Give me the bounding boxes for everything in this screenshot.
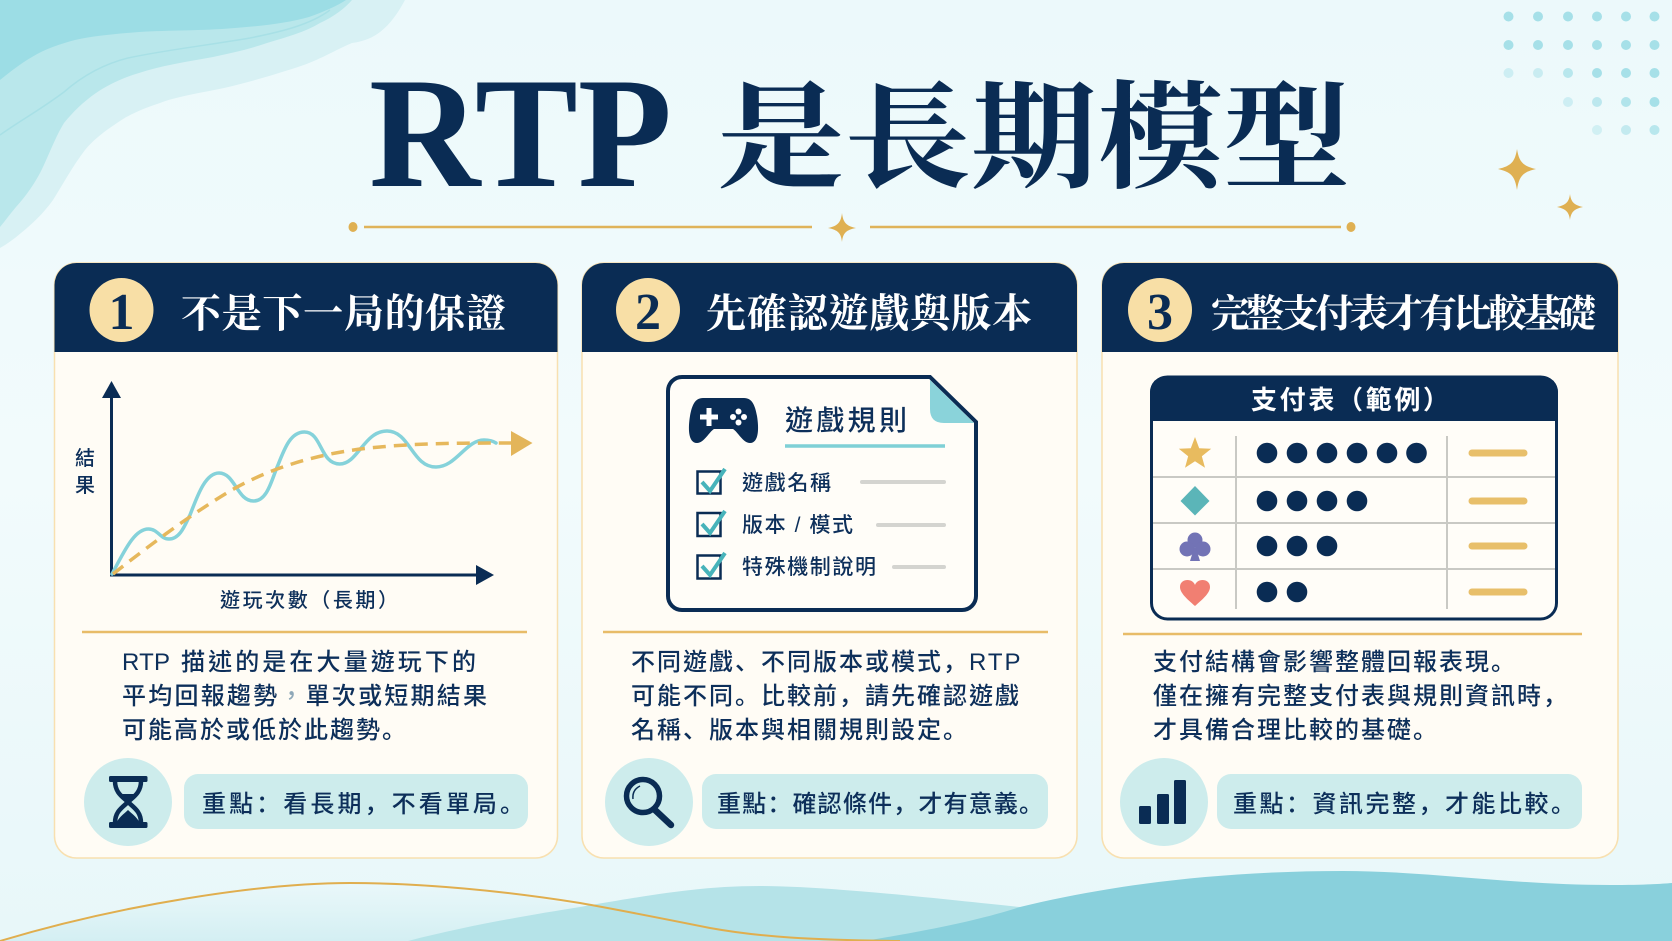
icon: hourglass [84, 758, 172, 846]
panel 2 body text [631, 642, 1023, 745]
paytable example [1150, 376, 1558, 619]
panel 3 number badge [1128, 278, 1192, 342]
panel 1 number badge: 1 [108, 284, 134, 341]
y axis [102, 381, 121, 576]
panel 3 background [1102, 263, 1618, 858]
game rules document [668, 377, 976, 610]
panel 2: confirm game and version [582, 263, 1077, 858]
panel 2 header bar [582, 263, 1077, 352]
sparkle small [1557, 194, 1583, 220]
panel 2 body text: 可能不同。比較前，請先確認遊戲 [631, 676, 1021, 711]
background waves: top-left [0, 0, 405, 248]
takeaway pill 2 [702, 774, 1048, 829]
panel 1 body text [122, 649, 489, 745]
panel 1 body text: 描述的是在大量遊玩下的 [181, 649, 478, 676]
checklist item: special mechanics: 特殊機制說明 [742, 556, 876, 579]
panel 3: complete paytable [1102, 263, 1618, 858]
y axis label [75, 447, 95, 497]
background waves: bottom [0, 871, 1672, 941]
title: 是長期模型 [718, 76, 1350, 204]
panel 1 body text: 平均回報趨勢，單次或短期結果 [122, 683, 489, 710]
title [369, 46, 1350, 221]
panel 3 body text: 僅在擁有完整支付表與規則資訊時， [1153, 676, 1569, 711]
sparkle large [1498, 149, 1536, 190]
checklist item: special mechanics [698, 553, 944, 579]
checklist item: version or mode [698, 511, 944, 537]
checklist item: version or mode: 版本 / 模式 [742, 514, 853, 537]
panel 3 number badge: 3 [1147, 284, 1173, 341]
title divider [348, 213, 1356, 242]
panel 1: not a guarantee [54, 263, 558, 858]
line chart: long term trend [75, 381, 532, 612]
y axis label: 結 [75, 447, 95, 470]
y axis label: 果 [75, 475, 95, 497]
icon: bar chart [1120, 758, 1208, 846]
panel 3 heading: 完整支付表才有比較基礎 [1211, 293, 1597, 336]
panel 2 body text: 不同遊戲、不同版本或模式，RTP [631, 642, 1023, 677]
row: diamond [1180, 486, 1524, 516]
takeaway pill 1: 重點：看長期，不看單局。 [202, 784, 524, 819]
long term average dashed arrow [113, 431, 532, 574]
panel 1 heading: 不是下一局的保證 [181, 291, 506, 336]
takeaway pill 3: 重點：資訊完整，才能比較。 [1233, 784, 1575, 819]
panel 3 header bar [1102, 263, 1618, 352]
takeaway pill 3 [1217, 774, 1582, 829]
x axis [110, 565, 494, 585]
icon: game controller [689, 398, 758, 443]
document title: 遊戲規則 [785, 405, 907, 436]
panel 1 number badge [90, 278, 154, 342]
takeaway pill 2: 重點：確認條件，才有意義。 [717, 784, 1043, 819]
panel 2 background [582, 263, 1077, 858]
panel 2 number badge: 2 [635, 284, 661, 341]
icon: magnifier [605, 758, 693, 846]
panel 1 header bar [54, 263, 558, 352]
panel 2 heading: 先確認遊戲與版本 [706, 291, 1032, 336]
title: RTP [369, 46, 672, 221]
paytable header: 支付表（範例） [1251, 385, 1449, 415]
checklist item: game name: 遊戲名稱 [742, 472, 831, 495]
panel 3 body text: 支付結構會影響整體回報表現。 [1153, 642, 1517, 677]
panel 2 number badge [616, 278, 680, 342]
paytable header [1150, 376, 1558, 421]
panel 1 body text: 可能高於或低於此趨勢。 [122, 710, 408, 745]
row: star [1179, 437, 1524, 468]
panel 3 body text [1153, 642, 1569, 745]
short term fluctuation curve [112, 431, 496, 574]
takeaway pill 1 [184, 774, 528, 829]
panel 3 body text: 才具備合理比較的基礎。 [1153, 710, 1439, 745]
panel 1 background [54, 263, 558, 858]
panel 1 body text: RTP [122, 649, 172, 676]
checklist item: game name [698, 469, 944, 495]
row: club [1180, 532, 1524, 561]
x axis label: 遊玩次數（長期） [220, 589, 398, 612]
row: heart [1180, 580, 1524, 606]
decorative dot grid top-right [1504, 12, 1660, 135]
document page fold [930, 380, 974, 423]
panel 2 body text: 名稱、版本與相關規則設定。 [631, 710, 969, 745]
